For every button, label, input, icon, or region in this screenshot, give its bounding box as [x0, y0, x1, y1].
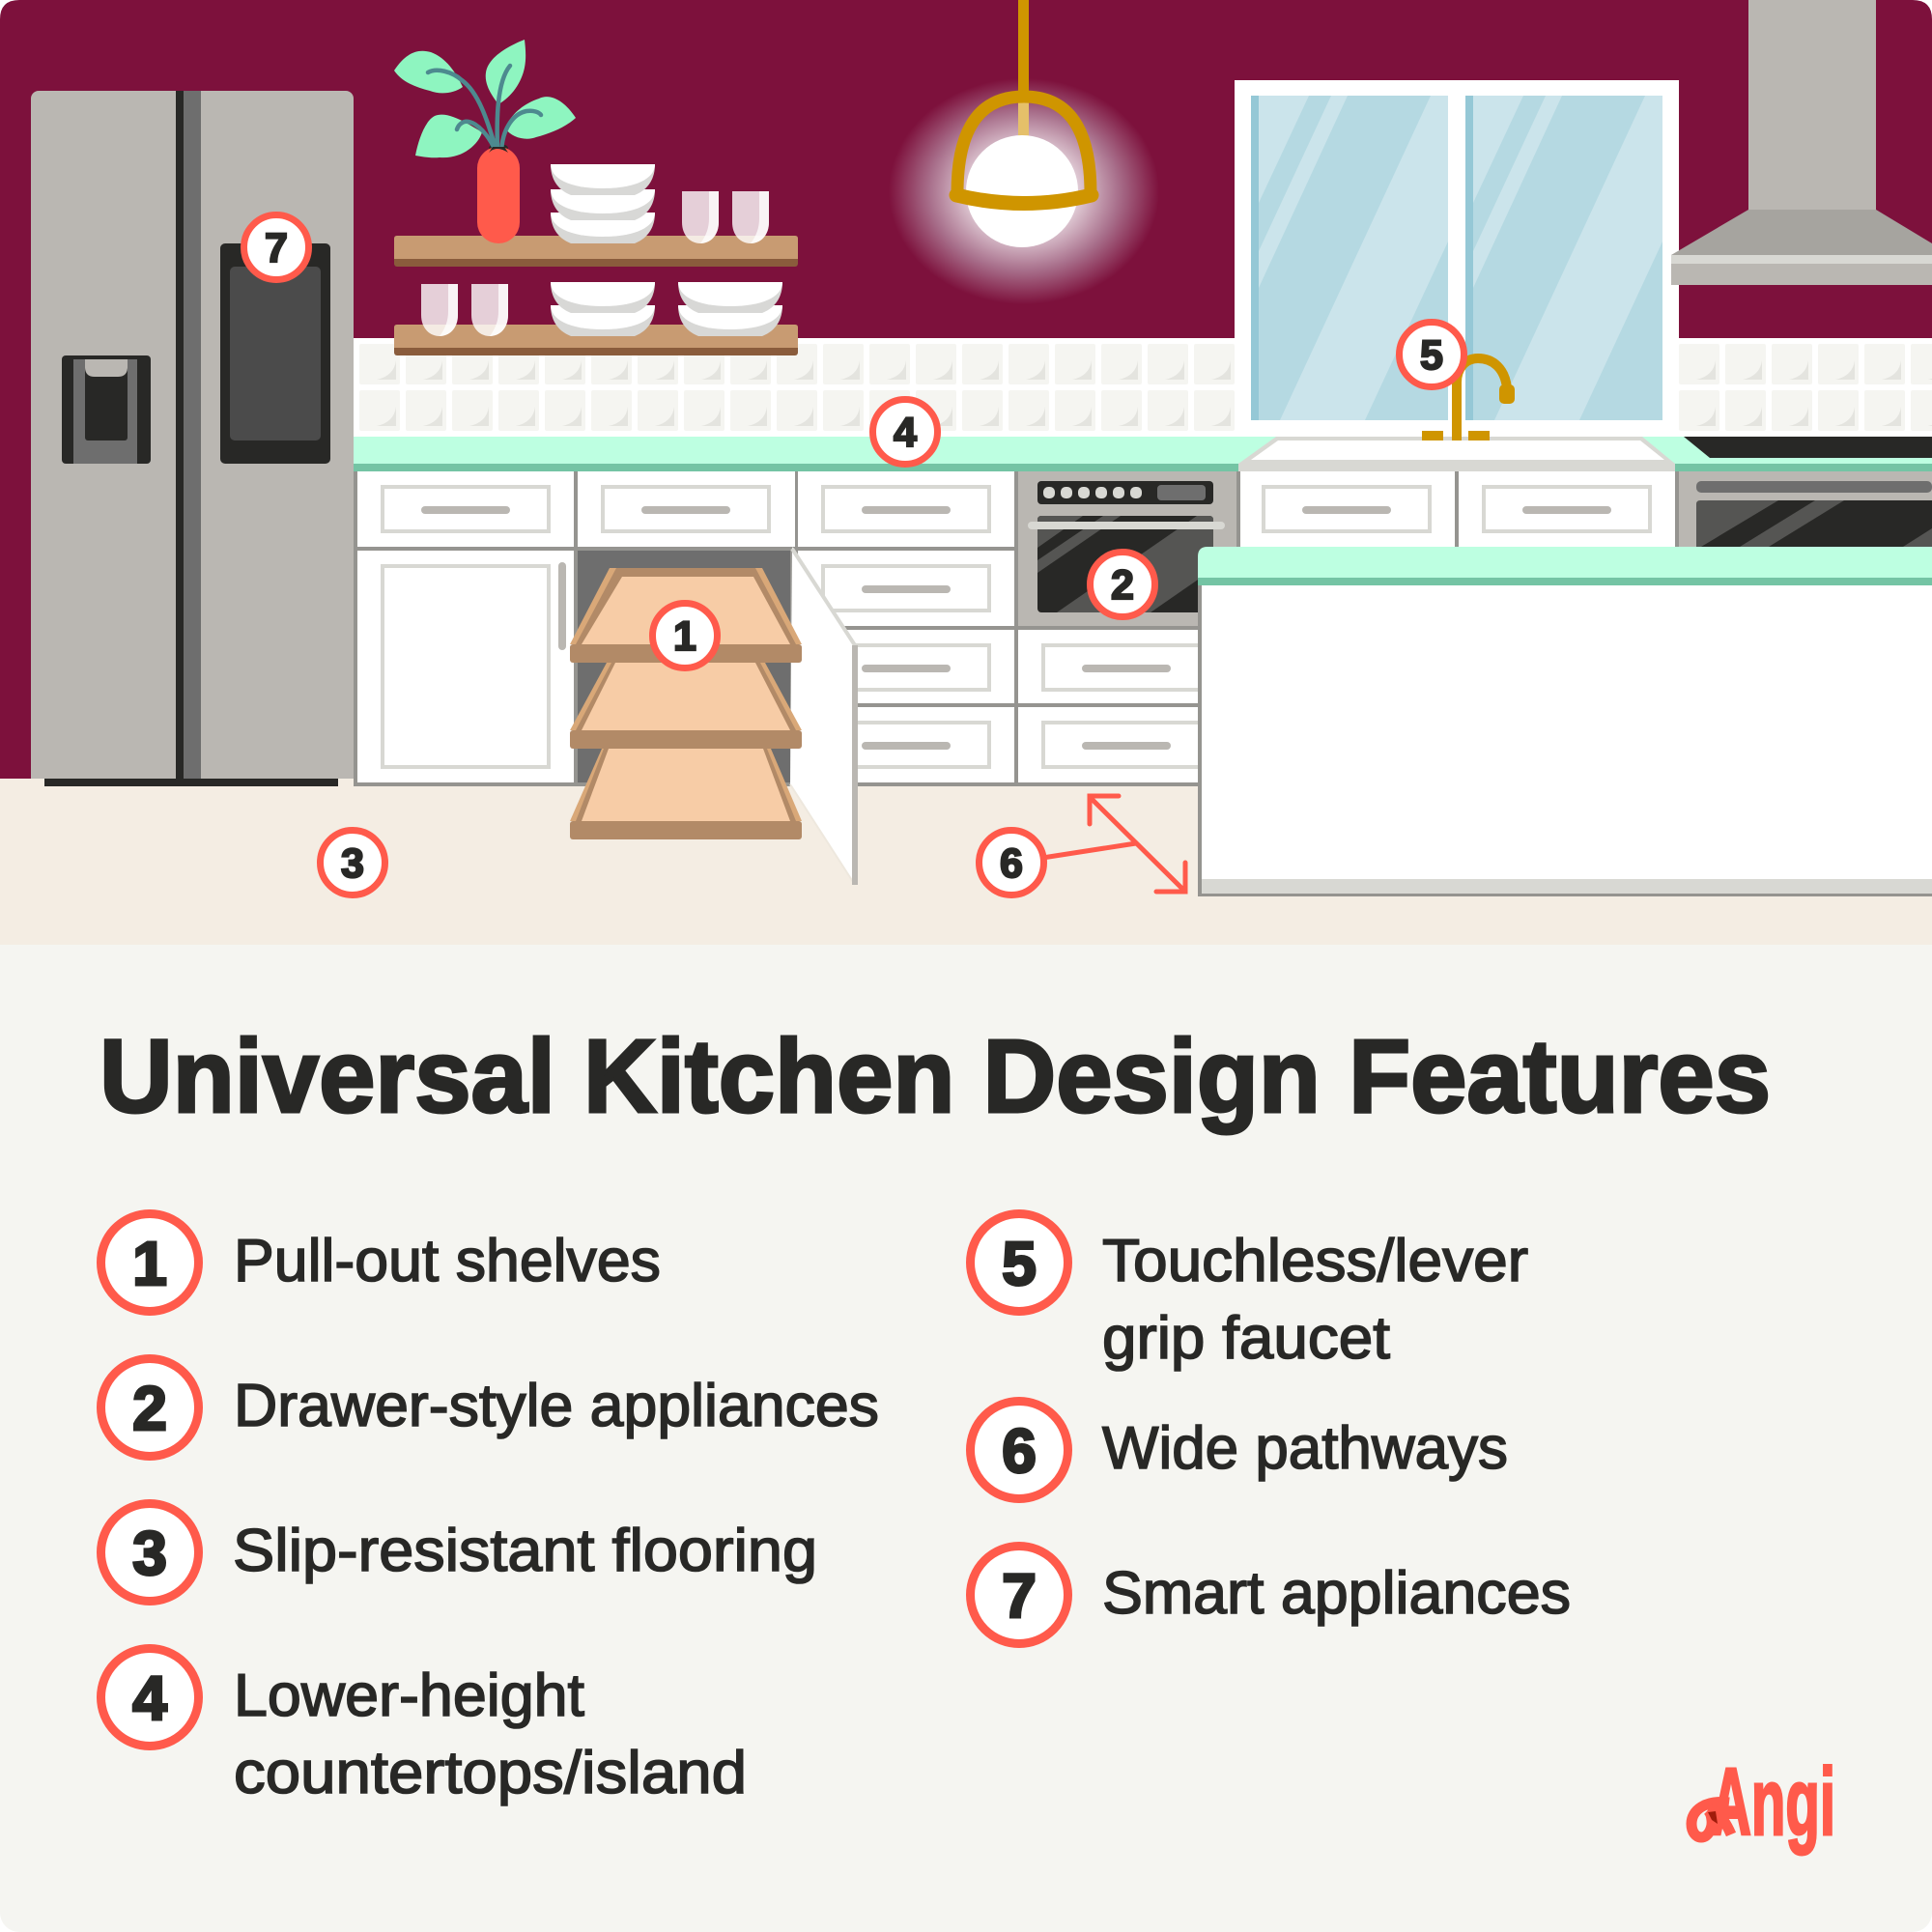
- built-in oven: [1018, 471, 1236, 626]
- wall: [0, 0, 1932, 348]
- badge 3: [321, 831, 384, 895]
- legend item 1: Pull-out shelves: [234, 1228, 661, 1294]
- badge 6: [980, 831, 1043, 895]
- legend: [100, 1213, 1571, 1806]
- badge 1: 1: [673, 613, 696, 660]
- legend item 5: [970, 1213, 1528, 1372]
- kitchen illustration: [0, 0, 1932, 945]
- logo: Angi: [1691, 1748, 1835, 1855]
- legend item 1: 1: [132, 1229, 167, 1298]
- legend item 3: 3: [132, 1519, 167, 1588]
- legend item 6: [970, 1401, 1508, 1499]
- shelf 3: [570, 749, 802, 839]
- open cabinet door: [790, 547, 858, 885]
- lower shelf: [394, 282, 798, 355]
- second oven at right: [1679, 471, 1932, 549]
- pendant lamp: [889, 0, 1159, 304]
- legend item 4: [100, 1648, 747, 1806]
- range hood: [1671, 0, 1932, 285]
- kitchen island: [1198, 547, 1932, 896]
- badge 3: 3: [341, 840, 364, 887]
- farmhouse sink: [1238, 437, 1675, 471]
- badge 7: 7: [265, 225, 288, 271]
- legend item 2: [100, 1358, 879, 1457]
- legend item 7: Smart appliances: [1102, 1560, 1571, 1627]
- title: Universal Kitchen Design Features: [99, 1017, 1771, 1134]
- badge 1: [653, 603, 717, 668]
- legend item 3: Slip-resistant flooring: [233, 1518, 817, 1584]
- backsplash tiles: [354, 338, 1932, 437]
- floor: [0, 779, 1932, 945]
- wall strip left of fridge: [0, 348, 39, 779]
- plant in red vase: [394, 40, 576, 243]
- legend item 6: Wide pathways: [1102, 1415, 1508, 1482]
- legend item 5: grip faucet: [1102, 1305, 1390, 1372]
- badge 2: 2: [1111, 562, 1134, 609]
- legend item 6: 6: [1002, 1416, 1037, 1486]
- badge 2: [1090, 553, 1155, 616]
- arrow: wide pathway: [1011, 796, 1185, 892]
- legend item 4: Lower-height: [234, 1662, 584, 1729]
- badge 4: 4: [894, 410, 917, 456]
- legend item 4: countertops/island: [234, 1740, 747, 1806]
- lower cabinets: [354, 471, 1932, 788]
- legend item 4: 4: [132, 1663, 167, 1733]
- badge 5: [1399, 323, 1464, 386]
- faucet: [1422, 358, 1515, 440]
- window: [1235, 80, 1679, 437]
- legend item 1: [100, 1213, 661, 1312]
- countertop: [354, 437, 1932, 471]
- logo: Angi: Angi: [1711, 1748, 1835, 1855]
- legend item 7: [970, 1546, 1571, 1644]
- shelf 1: [570, 568, 802, 663]
- badge 6: 6: [1000, 840, 1023, 887]
- legend item 2: 2: [132, 1374, 167, 1443]
- legend item 7: 7: [1002, 1561, 1037, 1631]
- badge 7: [243, 214, 309, 280]
- shelf 2: [570, 663, 802, 749]
- badge 4: [873, 400, 937, 464]
- upper shelf: [394, 164, 798, 267]
- legend item 3: [100, 1503, 817, 1602]
- pull-out shelves in open cabinet: [570, 547, 858, 885]
- legend item 5: Touchless/lever: [1102, 1228, 1528, 1294]
- refrigerator: [31, 91, 354, 786]
- legend item 5: 5: [1002, 1229, 1037, 1298]
- badge 5: 5: [1420, 332, 1443, 379]
- cooktop: [1684, 437, 1932, 458]
- legend item 2: Drawer-style appliances: [234, 1373, 879, 1439]
